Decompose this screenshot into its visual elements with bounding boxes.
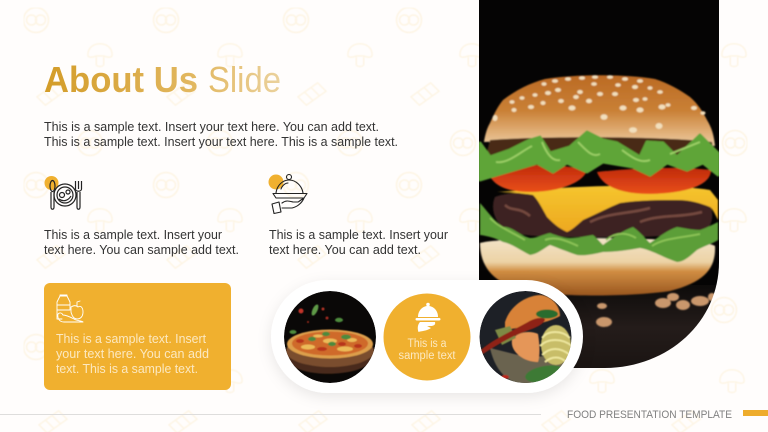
icon: serving cloche on hand	[268, 174, 307, 214]
text block: left column: This is a sample text. Insert your	[44, 228, 222, 242]
upper lettuce	[480, 132, 718, 180]
title: About Us	[44, 59, 198, 100]
lower lettuce	[480, 203, 718, 262]
text block: left column	[44, 228, 239, 257]
title: Slide	[208, 59, 281, 100]
crumbs on table	[596, 293, 716, 327]
sesame seeds	[492, 75, 706, 133]
text block: right column	[269, 228, 448, 257]
card text: text. This is a sample text.	[56, 362, 198, 376]
top bun	[484, 75, 715, 146]
footer label: FOOD PRESENTATION TEMPLATE	[567, 409, 732, 421]
badge label	[398, 338, 456, 362]
photo: noodle bowl	[480, 291, 572, 385]
card text: This is a sample text. Insert	[56, 332, 207, 346]
intro text block: This is a sample text. Insert your text here. You can add text.	[44, 120, 379, 134]
photo: pizza	[284, 291, 376, 383]
icon: white cloche on hand	[416, 303, 440, 332]
text block: right column: text here. You can add text.	[269, 243, 421, 257]
text block: left column: text here. You can sample add text.	[44, 243, 239, 257]
badge label: This is a	[408, 338, 447, 350]
text block: right column: This is a sample text. Insert your	[269, 228, 448, 242]
tomato slices	[488, 165, 587, 192]
footer rule	[0, 414, 541, 415]
cheese	[497, 186, 718, 232]
panel: yellow callout card	[44, 283, 231, 390]
bottom bun	[480, 238, 715, 296]
icon: plate with spoon and fork	[44, 176, 82, 209]
card text	[56, 332, 209, 376]
icon: groceries	[57, 295, 83, 322]
beef patty	[493, 192, 712, 237]
footer accent bar	[743, 410, 768, 416]
photo: burger	[479, 0, 719, 370]
intro text block: This is a sample text. Insert your text here. This is a sample text.	[44, 135, 398, 149]
title	[44, 59, 281, 100]
intro text block	[44, 120, 398, 149]
badge label: sample text	[398, 350, 456, 362]
badge: yellow circle with cloche	[384, 294, 470, 380]
card text: your text here. You can add	[56, 347, 209, 361]
panel: image and label pill	[271, 280, 583, 393]
